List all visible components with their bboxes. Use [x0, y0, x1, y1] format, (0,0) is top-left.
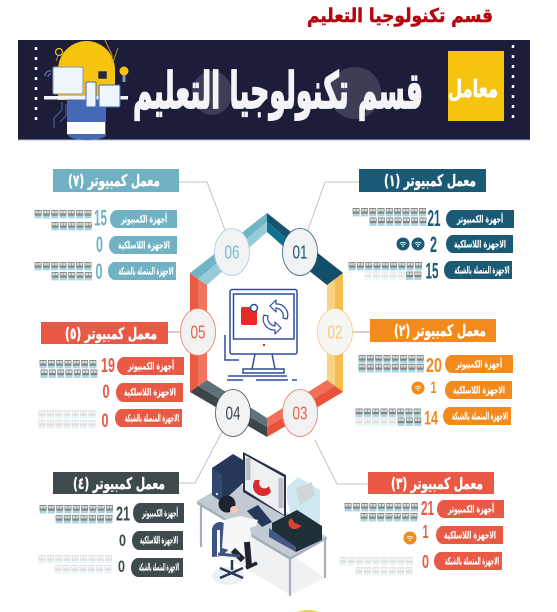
row: computers: 20 — [426, 355, 442, 377]
step circle 03: 03 — [292, 404, 308, 424]
row: networked — [349, 258, 512, 284]
heading: معمل كمبيوتر (١) — [384, 171, 476, 190]
heading: معمل كمبيوتر (٤) — [73, 474, 165, 493]
3D printer — [269, 477, 322, 552]
step circle 05 — [180, 308, 216, 356]
row: computers: أجهزة الكمبيوتر — [142, 506, 178, 520]
row: networked: 0 — [102, 411, 108, 432]
row: computers — [40, 503, 184, 526]
panel: lab 1 — [349, 169, 514, 284]
row: wireless: الاجهزة اللاسلكية — [140, 536, 178, 546]
row: wireless: الاجهزة اللاسلكية — [124, 388, 176, 398]
step circle 06 — [214, 228, 250, 276]
heading — [53, 169, 179, 192]
row: computers: أجهزة الكمبيوتر — [447, 502, 494, 516]
technician figure — [212, 496, 258, 578]
step circle 02: 02 — [328, 322, 342, 342]
segment 01 — [267, 213, 343, 285]
segment 03 — [267, 380, 343, 437]
row: computers — [40, 355, 184, 378]
yellow badge: معامل — [448, 75, 498, 103]
row: computers — [345, 498, 504, 521]
heading — [53, 472, 179, 494]
row: networked — [39, 409, 182, 432]
row: wireless — [412, 378, 512, 399]
row: wireless: الاجهزة اللاسلكية — [444, 530, 496, 542]
row: wireless — [404, 522, 503, 544]
row: networked — [35, 259, 176, 284]
row: computers: أجهزة الكمبيوتر — [120, 212, 167, 226]
row: computers — [359, 355, 513, 377]
row: computers — [353, 205, 514, 231]
panel: lab 3 — [340, 472, 504, 575]
row: wireless — [96, 232, 177, 257]
segment 06 — [190, 213, 267, 285]
segment 05 — [190, 273, 207, 392]
heading — [359, 169, 486, 192]
heading — [368, 472, 494, 494]
row: computers: 21 — [428, 205, 441, 231]
row: wireless: 0 — [96, 232, 103, 257]
banner — [18, 40, 530, 140]
icon: central monitor — [225, 290, 297, 380]
panel: lab 2 — [356, 319, 513, 430]
row: computers: أجهزة الكمبيوتر — [456, 212, 503, 226]
row: networked: 0 — [96, 259, 102, 284]
row: computers — [35, 206, 177, 230]
icon: devices illustration — [44, 40, 128, 140]
row: wireless: 2 — [430, 232, 437, 257]
row: networked — [356, 407, 511, 430]
row: wireless — [119, 531, 183, 550]
row: wireless: 1 — [430, 378, 436, 397]
row: computers: 15 — [94, 206, 107, 230]
step circle 05: 05 — [190, 322, 206, 342]
text: الاجهزة المتصلة بالشبكة — [139, 562, 179, 574]
panel: lab 7 — [35, 169, 179, 284]
step circle 02 — [318, 308, 352, 356]
segment 02 — [327, 273, 343, 392]
row: computers: أجهزة الكمبيوتر — [455, 358, 502, 370]
row: wireless — [396, 232, 513, 257]
panel: lab 5 — [39, 322, 184, 432]
row: wireless: الاجهزة اللاسلكية — [453, 386, 505, 396]
yellow badge — [448, 51, 504, 121]
row: networked: 15 — [426, 258, 438, 284]
row: computers: أجهزة الكمبيوتر — [127, 360, 174, 372]
heading — [370, 319, 496, 342]
row: networked: 0 — [118, 557, 125, 576]
panel: lab 4 — [39, 472, 184, 577]
row: wireless — [102, 382, 183, 403]
step circle 04 — [216, 390, 250, 436]
heading: معمل كمبيوتر (٥) — [65, 324, 157, 343]
segment 04 — [190, 380, 267, 437]
row: networked: 0 — [422, 552, 429, 572]
row: networked — [340, 552, 502, 575]
heading: معمل كمبيوتر (٧) — [68, 171, 160, 190]
row: networked: 14 — [424, 408, 438, 430]
decorative yellow arc — [295, 610, 321, 612]
hexagon ring — [190, 213, 343, 437]
row: wireless: الاجهزة اللاسلكية — [118, 240, 170, 252]
computer tower — [212, 454, 243, 502]
text: الاجهزة المتصلة بالشبكة — [125, 414, 179, 424]
illustration: technician at desk — [197, 452, 327, 596]
panel: lab 7: الاجهزة المتصلة بالشبكة — [118, 266, 174, 278]
row: computers: 21 — [421, 498, 434, 520]
connector lines — [168, 182, 370, 484]
row: wireless: 0 — [119, 531, 126, 550]
row: wireless: 1 — [422, 522, 428, 542]
row: wireless: 0 — [102, 382, 110, 403]
step circle 01: 01 — [292, 242, 308, 262]
heading: معمل كمبيوتر (٢) — [394, 321, 486, 340]
row: computers: 19 — [101, 355, 115, 377]
row: networked — [39, 555, 183, 577]
desktop monitor — [243, 452, 286, 527]
title: قسم تكنولوجيا التعليم — [307, 5, 493, 27]
step circle 01 — [282, 228, 318, 276]
step circle 04: 04 — [226, 404, 240, 424]
step circle 03 — [282, 390, 318, 436]
heading: معمل كمبيوتر (٣) — [391, 474, 483, 493]
row: computers: 21 — [116, 504, 130, 526]
row: wireless: الاجهزة اللاسلكية — [454, 240, 506, 250]
heading — [41, 322, 168, 344]
step circle 06: 06 — [224, 242, 240, 262]
